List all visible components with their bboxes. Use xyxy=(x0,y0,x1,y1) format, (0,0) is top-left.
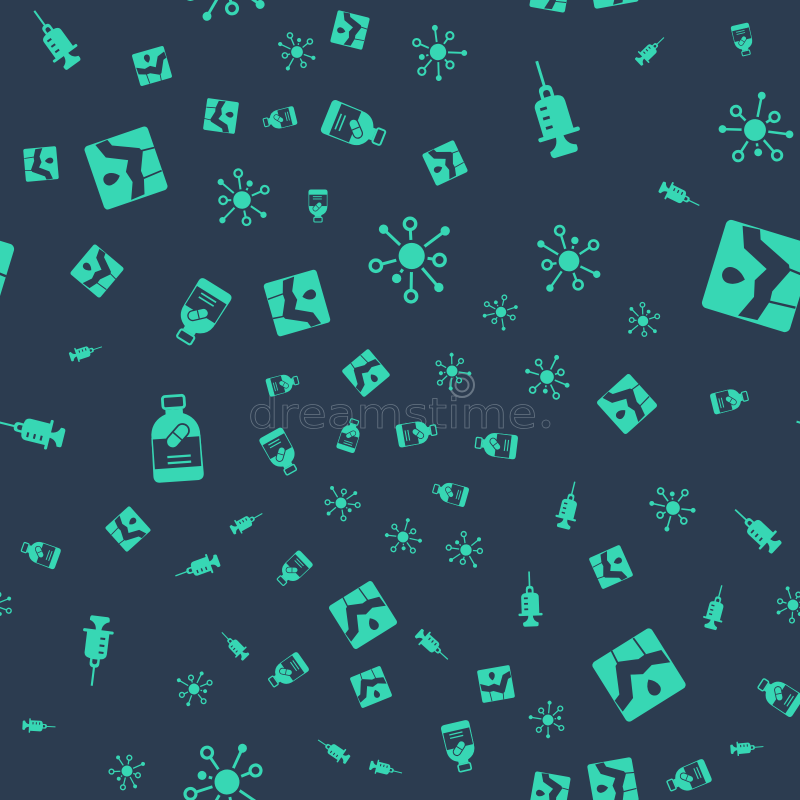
bottle icon xyxy=(308,190,328,222)
crack icon bottom xyxy=(529,771,571,800)
syringe icon xyxy=(314,733,352,767)
crack icon xyxy=(422,140,468,186)
network icon xyxy=(477,289,522,333)
crack icon xyxy=(263,269,331,337)
crack icon xyxy=(132,46,172,86)
syringe icon xyxy=(701,583,731,631)
crack icon xyxy=(350,666,392,708)
network icon xyxy=(380,515,427,563)
syringe icon xyxy=(22,718,56,734)
syringe icon xyxy=(216,627,252,663)
watermark: dreamstime xyxy=(248,389,537,438)
crack icon xyxy=(23,146,59,182)
network icon xyxy=(627,302,661,337)
bottle icon xyxy=(664,758,713,798)
bottle icon xyxy=(754,672,800,718)
syringe icon xyxy=(0,407,67,453)
bottle icon xyxy=(336,417,364,454)
syringe icon xyxy=(172,551,222,585)
bottle icon xyxy=(167,276,233,351)
bottle icon xyxy=(264,651,310,693)
bottle icon xyxy=(709,385,750,415)
network icon large xyxy=(370,218,450,302)
crack icon xyxy=(328,580,398,650)
network icon xyxy=(643,476,702,536)
network icon xyxy=(173,667,218,711)
network icon xyxy=(323,485,362,522)
bottle icon xyxy=(258,426,303,479)
bottle icon xyxy=(431,479,470,508)
crack icon wrapped top xyxy=(529,0,571,13)
syringe icon xyxy=(22,2,86,74)
network icon wrapped top xyxy=(173,0,273,31)
crack icon xyxy=(105,506,151,552)
crack icon xyxy=(70,244,124,298)
crack icon xyxy=(596,373,658,435)
network icon xyxy=(519,350,576,408)
watermark xyxy=(248,373,550,438)
crack icon xyxy=(341,348,391,398)
network icon xyxy=(529,216,610,299)
syringe icon xyxy=(633,32,669,68)
bottle icon xyxy=(273,549,314,590)
bottle icon xyxy=(395,418,438,448)
crack icon large xyxy=(83,125,169,211)
crack icon large right xyxy=(701,219,800,333)
network icon xyxy=(106,752,146,793)
bottle icon xyxy=(320,99,390,155)
syringe icon wrapped right xyxy=(793,407,800,453)
crack icon xyxy=(477,665,515,703)
network icon xyxy=(708,85,800,182)
crack icon xyxy=(589,545,633,589)
bottle icon xyxy=(474,430,518,460)
syringe icon xyxy=(68,340,104,364)
bottle icon xyxy=(262,106,298,132)
bottle icon xyxy=(440,719,480,774)
network icon xyxy=(444,530,484,568)
syringe icon xyxy=(517,571,543,627)
network icon xyxy=(426,348,474,396)
crack icon wrapped top xyxy=(587,0,639,9)
crack icon bottom xyxy=(587,757,639,800)
syringe icon xyxy=(730,739,764,757)
syringe icon xyxy=(412,626,454,666)
network icon wrapped left xyxy=(0,585,16,628)
network icon xyxy=(400,17,472,89)
syringe icon xyxy=(368,758,404,780)
syringe icon large xyxy=(516,55,586,161)
syringe icon xyxy=(228,507,266,537)
crack icon xyxy=(203,98,239,134)
bottle icon large xyxy=(148,394,204,483)
network icon xyxy=(526,695,574,743)
syringe icon xyxy=(657,178,703,214)
network icon right edge xyxy=(772,585,800,628)
network icon xyxy=(212,165,274,229)
crack icon xyxy=(330,10,370,50)
bottle icon xyxy=(19,536,62,570)
syringe icon xyxy=(727,500,785,558)
crack icon large xyxy=(591,627,687,723)
bottle icon xyxy=(265,371,300,397)
syringe icon xyxy=(553,479,585,531)
crack icon wrapped left xyxy=(0,219,15,333)
syringe icon xyxy=(76,614,116,688)
network icon bottom xyxy=(173,733,273,800)
bottle icon xyxy=(730,22,756,57)
network icon xyxy=(273,26,321,74)
